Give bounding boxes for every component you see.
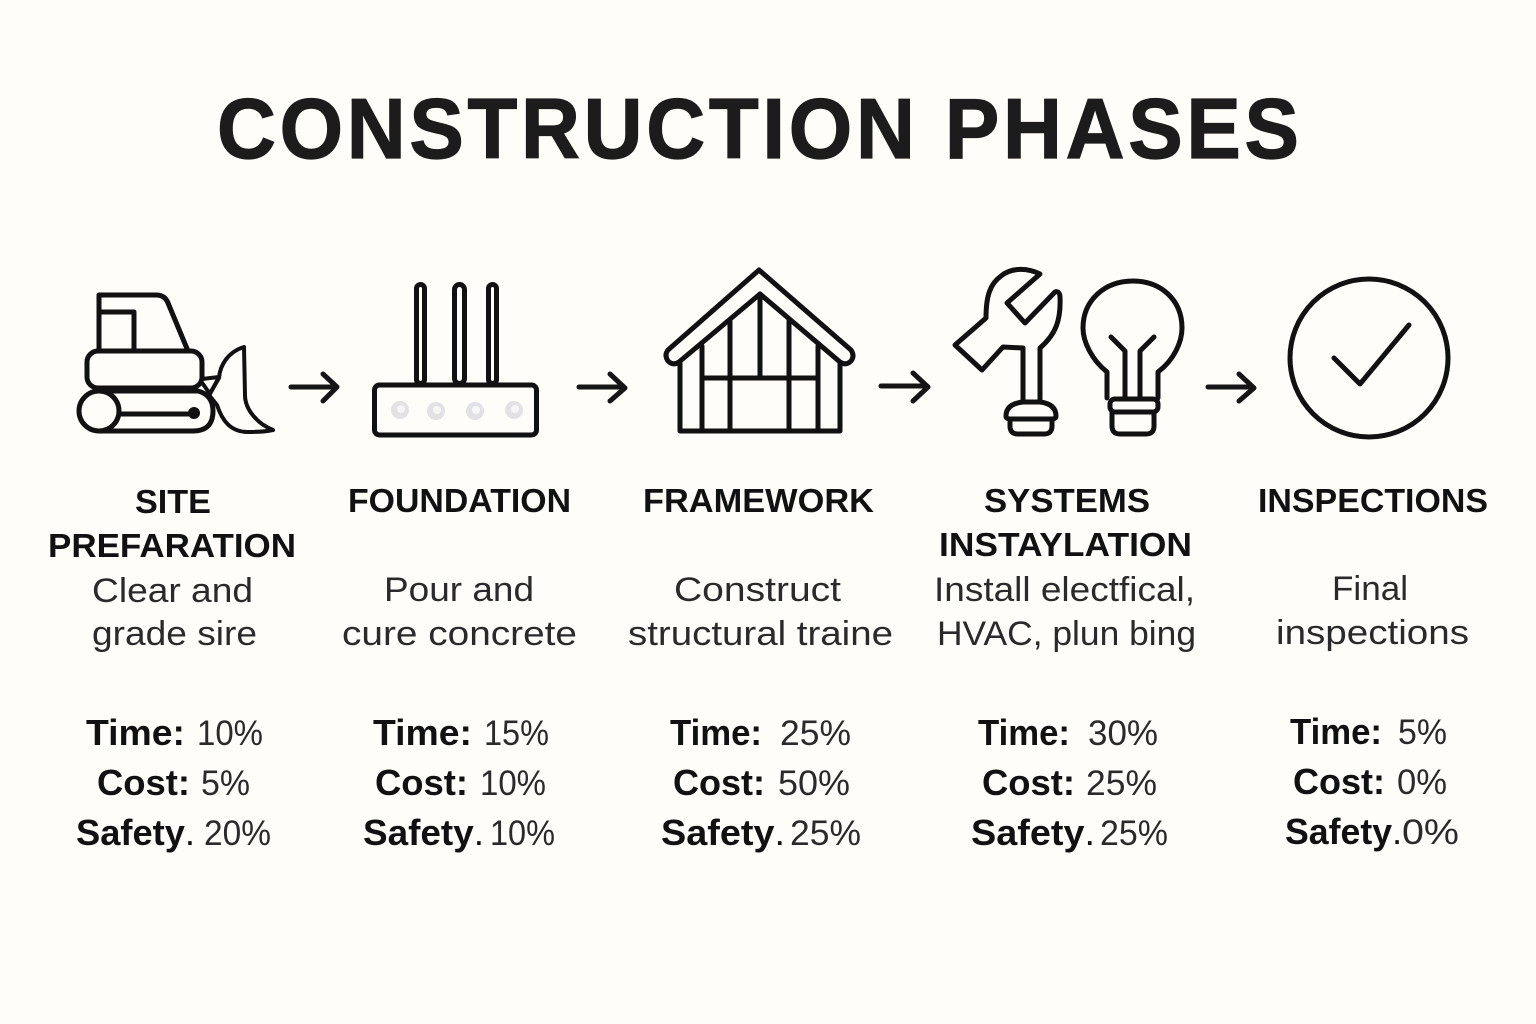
stats: 10% bbox=[480, 764, 546, 803]
stats: 5% bbox=[1398, 713, 1447, 752]
icon: wrench and hammer tool bbox=[955, 269, 1060, 434]
stats: Cost: bbox=[375, 762, 468, 803]
stats: Cost: bbox=[97, 762, 190, 803]
foundation anchor dots bbox=[391, 401, 523, 420]
description: HVAC, plun bing bbox=[937, 615, 1196, 653]
stats: Cost: bbox=[982, 762, 1075, 803]
stats bbox=[661, 712, 861, 853]
description: inspections bbox=[1276, 614, 1469, 652]
stats bbox=[76, 712, 271, 853]
heading: FOUNDATION bbox=[348, 482, 571, 519]
icon: foundation bbox=[374, 284, 536, 435]
description bbox=[92, 572, 257, 653]
stats: Safety. bbox=[76, 812, 195, 853]
foundation slab bbox=[374, 385, 536, 435]
stats bbox=[1285, 711, 1459, 852]
stats: 15% bbox=[484, 714, 549, 753]
icon: bulldozer bbox=[79, 295, 273, 432]
column: foundation bbox=[342, 482, 577, 853]
arrow: site preparation to foundation bbox=[291, 374, 337, 401]
icon: light bulb bbox=[1083, 281, 1182, 434]
description bbox=[628, 571, 893, 653]
column: inspections bbox=[1258, 482, 1488, 852]
stats: 25% bbox=[1100, 814, 1168, 853]
stats: 25% bbox=[790, 814, 861, 853]
stats: Safety. bbox=[1285, 811, 1402, 852]
column: framework bbox=[628, 482, 893, 853]
stats: 30% bbox=[1088, 714, 1158, 753]
stats bbox=[971, 712, 1168, 853]
heading: SYSTEMS bbox=[984, 482, 1150, 519]
icon: house framing bbox=[666, 270, 853, 431]
description: cure concrete bbox=[342, 615, 577, 653]
stats: 20% bbox=[204, 814, 271, 853]
stats: 0% bbox=[1397, 763, 1447, 802]
description bbox=[342, 571, 577, 653]
stats: 5% bbox=[201, 764, 250, 803]
heading: INSTAYLATION bbox=[939, 526, 1192, 563]
stats: Safety. bbox=[661, 812, 785, 853]
arrow: foundation to framework bbox=[579, 374, 625, 401]
heading bbox=[48, 483, 296, 564]
description: Clear and bbox=[92, 572, 253, 610]
stats: 0% bbox=[1402, 813, 1459, 852]
heading: PREFARATION bbox=[48, 527, 296, 564]
heading bbox=[939, 482, 1192, 563]
description: Pour and bbox=[384, 571, 534, 609]
heading: INSPECTIONS bbox=[1258, 482, 1488, 519]
stats: 50% bbox=[778, 764, 850, 803]
description: Final bbox=[1332, 570, 1408, 608]
stats: 25% bbox=[780, 714, 851, 753]
heading: FRAMEWORK bbox=[643, 482, 874, 519]
stats: Time: bbox=[1290, 711, 1382, 752]
title: CONSTRUCTION PHASES bbox=[217, 81, 1299, 176]
stats: Time: bbox=[373, 712, 472, 753]
description: grade sire bbox=[92, 615, 257, 653]
description: Construct bbox=[674, 571, 842, 609]
description bbox=[1276, 570, 1469, 652]
stats: Safety. bbox=[971, 812, 1095, 853]
stats: 10% bbox=[197, 714, 263, 753]
stats: 25% bbox=[1086, 764, 1157, 803]
stats: Cost: bbox=[1293, 761, 1385, 802]
description: structural traine bbox=[628, 615, 893, 653]
heading: SITE bbox=[135, 483, 211, 520]
stats: Time: bbox=[670, 712, 762, 753]
description: Install electfical, bbox=[934, 571, 1195, 609]
foundation posts bbox=[416, 284, 496, 384]
description bbox=[934, 571, 1196, 653]
arrow: systems to inspections bbox=[1208, 374, 1254, 401]
column: systems installation bbox=[934, 482, 1196, 853]
stats: Cost: bbox=[673, 762, 765, 803]
column: site preparation bbox=[48, 483, 296, 853]
icon: check circle bbox=[1290, 279, 1448, 437]
stats: Time: bbox=[86, 712, 185, 753]
stats: 10% bbox=[490, 814, 555, 853]
stats: Safety. bbox=[363, 812, 484, 853]
arrow: framework to systems bbox=[881, 373, 928, 401]
stats bbox=[363, 712, 555, 853]
stats: Time: bbox=[978, 712, 1070, 753]
